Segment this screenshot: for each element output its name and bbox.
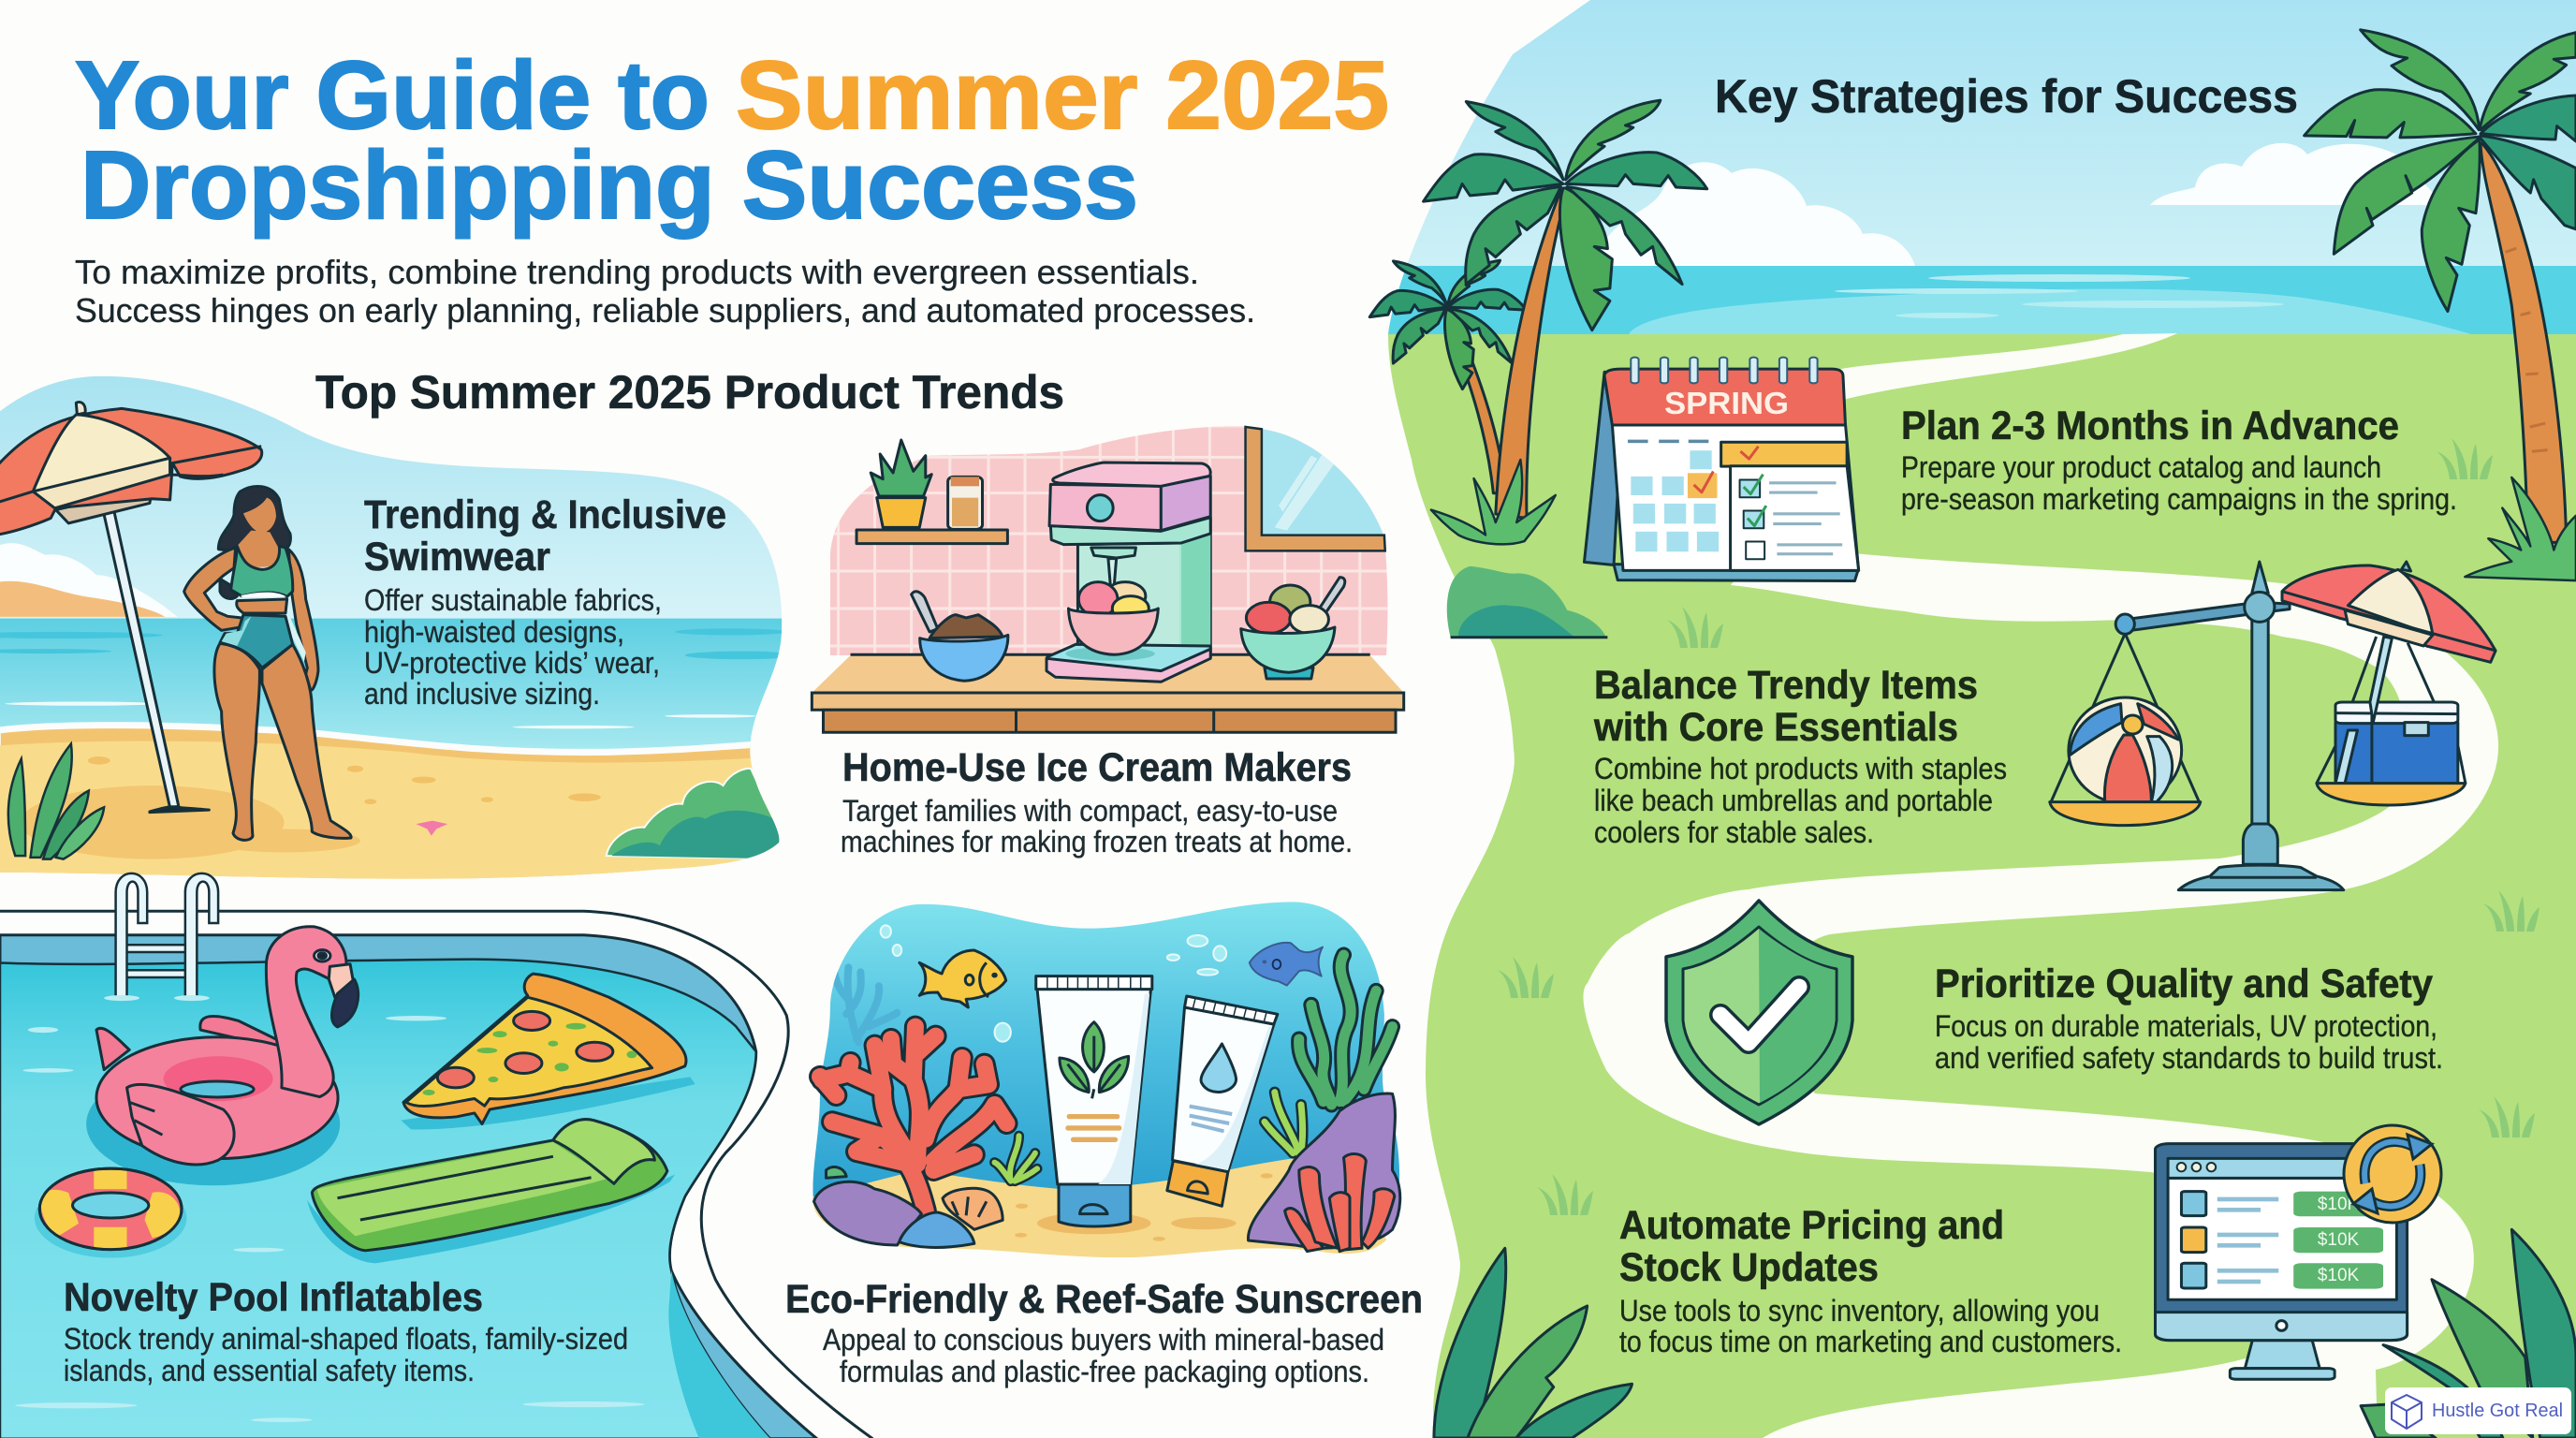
text: swimwear description: high-waisted designs,: [364, 615, 624, 649]
strategy text: balance trendy items: with Core Essentials: [1593, 705, 1958, 750]
icon: blue fish: [1250, 943, 1323, 986]
icon: sync badge: [2344, 1125, 2441, 1223]
panel: reef-safe sunscreen: [785, 889, 1445, 1388]
strategy text: balance trendy items: coolers for stable sales.: [1594, 815, 1874, 849]
heading: pool inflatables: Novelty Pool Inflatables: [64, 1275, 483, 1320]
heading: key strategies: Key Strategies for Success: [1715, 70, 2298, 123]
tiled wall: [830, 426, 1387, 655]
strategy text: automate pricing: Stock Updates: [1619, 1245, 1879, 1290]
heading: swimwear: Trending & Inclusive: [364, 492, 726, 537]
icon: computer monitor with sync badge: $10K: [2318, 1195, 2360, 1214]
strategy text: plan in advance: Plan 2-3 Months in Advance: [1901, 404, 2399, 448]
calendar label: SPRING: [1664, 386, 1789, 420]
intro paragraph: Success hinges on early planning, reliable suppliers, and automated processes.: [75, 291, 1255, 330]
text: swimwear description: [364, 583, 662, 711]
icon: red coral: [820, 1027, 1007, 1211]
right palm tree: [2305, 30, 2576, 580]
icon: scoops bowl: [1241, 578, 1345, 679]
strategy text: plan in advance: pre-season marketing campaigns in the spring.: [1901, 482, 2457, 516]
icon: rocks and shell: [814, 1167, 1003, 1247]
intro paragraph: To maximize profits, combine trending products with evergreen essentials.: [75, 253, 1199, 291]
icon: chocolate ice cream bowl: [912, 592, 1008, 681]
icon: purple rock with tube coral: [1248, 1093, 1400, 1252]
icon: plant: [8, 743, 104, 859]
icon: small sunscreen tube: [1167, 996, 1278, 1206]
text: pool inflatables description: [64, 1322, 628, 1387]
strategy text: automate pricing: Automate Pricing and: [1619, 1203, 2004, 1248]
text: ice cream description: Target families with compact, easy-to-use: [842, 794, 1338, 828]
heading: sunscreen: Eco-Friendly & Reef-Safe Sunscreen: [785, 1277, 1423, 1322]
text: sunscreen description: [823, 1323, 1384, 1388]
strategy text: quality and safety: and verified safety standards to build trust.: [1935, 1041, 2443, 1075]
icon: pizza float: [403, 974, 686, 1124]
text: swimwear description: and inclusive sizing.: [364, 677, 600, 711]
heading: ice cream makers: Home-Use Ice Cream Makers: [842, 745, 1352, 790]
shaded water along pool wall: [668, 1270, 770, 1438]
icon: shield with checkmark: [1666, 901, 1852, 1124]
water shadows under floats: [35, 1077, 695, 1263]
bush: [607, 769, 792, 859]
right pan with cooler: [2317, 637, 2466, 784]
clouds: [1591, 143, 2445, 266]
icon: spring calendar: [1584, 358, 1859, 580]
text: sunscreen description: formulas and plastic-free packaging options.: [840, 1355, 1369, 1388]
pool deck outline: [0, 911, 872, 1438]
grass lawn: [1357, 334, 2576, 1438]
icon: seaweed: [1265, 955, 1393, 1154]
heading: swimwear: [364, 492, 726, 580]
grass tufts: [1498, 438, 2539, 1215]
foreground leaves: [1434, 1229, 2576, 1438]
main title: Summer 2025: [736, 41, 1389, 149]
strategy text: automate pricing: to focus time on marketing and customers.: [1619, 1325, 2122, 1358]
winding path: top segment: [1840, 333, 2177, 399]
heading: swimwear: Swimwear: [364, 535, 550, 580]
icon: ice cream machine: [1046, 462, 1210, 682]
left palm trees: [1369, 100, 1707, 638]
sky: [1357, 0, 2576, 271]
sand: [812, 1159, 1387, 1258]
scale beam: [2125, 602, 2290, 630]
heading: product trends: Top Summer 2025 Product Trends: [315, 366, 1064, 418]
text: pool inflatables description: Stock trendy animal-shaped floats, family-sized: [64, 1322, 628, 1356]
pool wall: [0, 935, 817, 1438]
bubbles: [881, 925, 1226, 1042]
strategy text: balance trendy items: Combine hot products with staples: [1594, 752, 2007, 785]
woman in swimwear: [184, 487, 351, 840]
icon: flamingo float: [86, 927, 359, 1185]
text: swimwear description: Offer sustainable fabrics,: [364, 583, 662, 617]
panel: trending swimwear: [0, 374, 812, 899]
icon: yellow fish: [919, 950, 1006, 1007]
winding path: [1583, 524, 2498, 1438]
text: pool inflatables description: islands, and essential safety items.: [64, 1354, 475, 1387]
large left palm: [1424, 100, 1707, 544]
icon: large sunscreen tube: [1036, 976, 1152, 1226]
left pan with beach ball: [2051, 634, 2199, 802]
main title: Dropshipping Success: [80, 131, 1138, 239]
strategy text: plan in advance: [1901, 404, 2457, 516]
cloud and hill: [0, 543, 178, 617]
beach umbrella on scale: [2282, 565, 2496, 662]
text: sunscreen description: Appeal to conscious buyers with mineral-based: [823, 1323, 1384, 1357]
icon: computer monitor with sync badge: [2155, 1125, 2441, 1379]
panel: pool inflatables: [0, 873, 872, 1438]
text: ice cream description: [841, 794, 1353, 858]
main title: Your Guide to: [75, 41, 710, 149]
panel: ice cream makers: [811, 425, 1406, 858]
strategy text: quality and safety: Prioritize Quality and Safety: [1935, 961, 2433, 1006]
strategy text: quality and safety: Focus on durable materials, UV protection,: [1935, 1009, 2437, 1043]
ladder: [116, 873, 218, 997]
small palm: [1369, 260, 1526, 493]
strategy text: balance trendy items: [1593, 663, 2007, 849]
text: ice cream description: machines for making frozen treats at home.: [841, 825, 1353, 858]
strategy text: balance trendy items: Balance Trendy Items: [1594, 663, 1978, 708]
icon: sea plant small: [995, 1136, 1037, 1181]
icon: computer monitor with sync badge: $10K: [2318, 1230, 2360, 1250]
icon: beach umbrella: [0, 402, 262, 813]
icon: swim ring: [39, 1168, 182, 1250]
strategy text: automate pricing: [1619, 1203, 2122, 1358]
main title: [75, 41, 1389, 239]
watermark badge: Hustle Got Real: [2432, 1401, 2563, 1421]
bush under palms: [1447, 566, 1607, 638]
strategy text: balance trendy items: like beach umbrellas and portable: [1594, 784, 1993, 817]
scale base and post: [2178, 865, 2344, 890]
pool water: [0, 960, 770, 1438]
faded background coral: [834, 967, 897, 1042]
panel: key strategies landscape: [1357, 0, 2576, 1438]
intro paragraph: [75, 253, 1255, 330]
text: swimwear description: UV-protective kids’ wear,: [364, 646, 660, 680]
strategy text: plan in advance: Prepare your product catalog and launch: [1901, 450, 2381, 484]
icon: computer monitor with sync badge: $10K: [2318, 1266, 2360, 1285]
starfish: [417, 821, 447, 836]
counter: [812, 654, 1404, 732]
window frame: [1246, 427, 1385, 550]
strategy text: quality and safety: [1935, 961, 2443, 1075]
sea: [1357, 266, 2576, 335]
icon: green air mattress: [312, 1120, 667, 1251]
icon: balance scale with beach ball and cooler: [2050, 562, 2496, 890]
watermark badge: [2385, 1387, 2571, 1434]
strategy text: automate pricing: Use tools to sync inventory, allowing you: [1619, 1294, 2100, 1328]
shelf with plant and jar: [856, 440, 1007, 544]
